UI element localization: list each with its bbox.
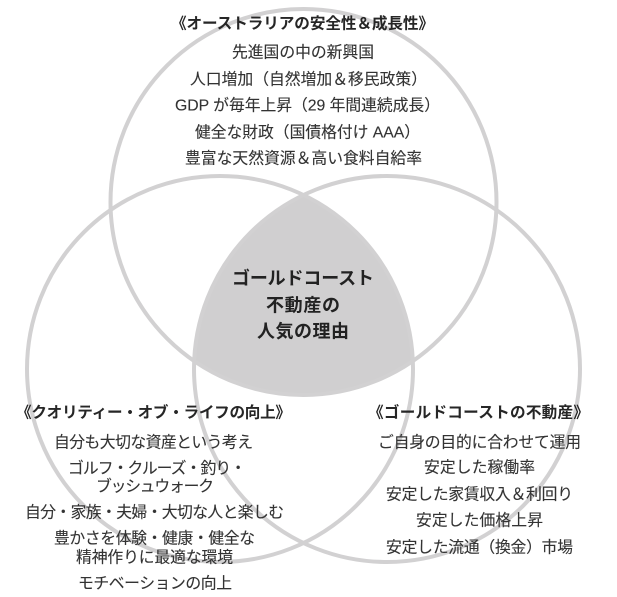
heading: Gold Coast property: 《ゴールドコーストの不動産》	[368, 402, 589, 422]
circle: bottom right	[194, 176, 580, 562]
item: bushwalk: ブッシュウォーク	[96, 476, 214, 496]
text block: quality of life	[16, 402, 291, 592]
item: rent: 安定した家賃収入＆利回り	[386, 486, 573, 504]
item: motivation: モチベーションの向上	[78, 574, 232, 592]
heading: quality of life: 《クオリティー・オブ・ライフの向上》	[16, 402, 291, 422]
text block: centre	[232, 268, 374, 342]
text block: Gold Coast property	[368, 402, 589, 556]
item: occupancy: 安定した稼働率	[424, 458, 535, 476]
circle: top	[110, 9, 496, 395]
item: purpose: ご自身の目的に合わせて運用	[378, 434, 581, 452]
item: asset: 自分も大切な資産という考え	[54, 434, 253, 452]
item: finance: 健全な財政（国債格付け AAA）	[195, 124, 420, 142]
item: liquidity: 安定した流通（換金）市場	[386, 538, 573, 556]
circle: bottom left	[27, 176, 413, 562]
item: golf: ゴルフ・クルーズ・釣り・	[68, 458, 246, 478]
item: population: 人口増加（自然増加＆移民政策）	[190, 70, 427, 88]
item: emerging: 先進国の中の新興国	[232, 44, 374, 62]
item: family: 自分・家族・夫婦・大切な人と楽しむ	[25, 504, 284, 522]
item: spirit: 精神作りに最適な環境	[76, 548, 233, 566]
item: resources: 豊富な天然資源＆高い食料自給率	[185, 150, 422, 168]
centre line 2: 不動産の	[266, 296, 340, 316]
item: GDP: GDP が毎年上昇（29 年間連続成長）	[175, 96, 440, 114]
text block: Australia	[171, 14, 440, 168]
centre line 1: ゴールドコースト	[232, 268, 374, 288]
item: price: 安定した価格上昇	[416, 512, 543, 530]
shaded centre intersection	[194, 195, 413, 395]
item: experience: 豊かさを体験・健康・健全な	[54, 530, 255, 548]
heading: Australia: 《オーストラリアの安全性＆成長性》	[171, 14, 434, 32]
centre line 3: 人気の理由	[257, 320, 349, 342]
